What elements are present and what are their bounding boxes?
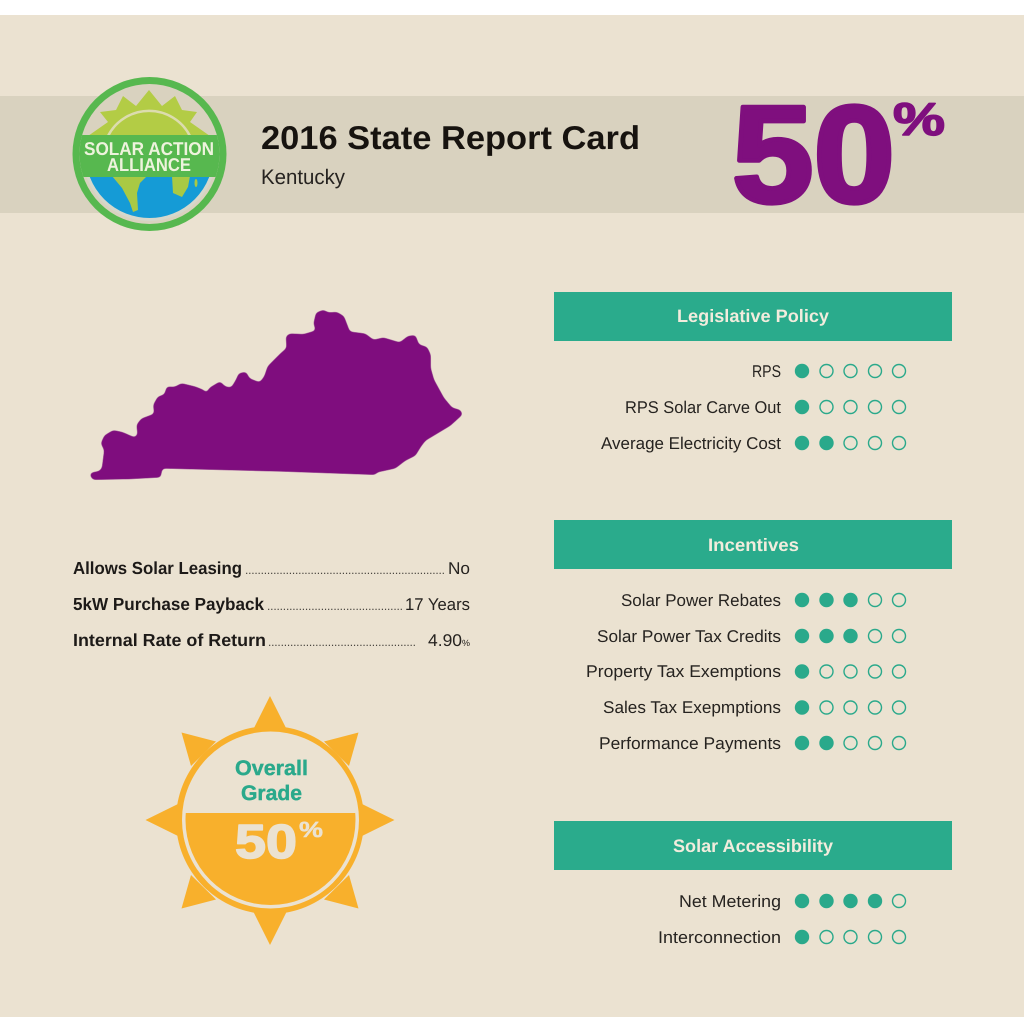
fact: solar leasing: ................................................................ xyxy=(245,563,445,577)
heading bar xyxy=(554,520,952,569)
row: interconnection: Interconnection xyxy=(658,928,781,947)
heading bar xyxy=(554,292,952,341)
row: average electricity cost xyxy=(601,434,906,453)
fact: rate of return: 4.90 xyxy=(428,631,462,650)
badge score xyxy=(235,816,323,869)
row: solar power rebates xyxy=(621,591,906,610)
row: RPS: RPS xyxy=(752,362,781,381)
row: property tax exemptions: Property Tax Exemptions xyxy=(586,662,781,681)
fact: solar leasing xyxy=(73,558,470,578)
badge label: Grade xyxy=(241,782,302,805)
fact: payback xyxy=(73,594,470,614)
fact: rate of return xyxy=(73,630,470,650)
row: average electricity cost: Average Electricity Cost xyxy=(601,434,781,453)
badge: overall grade sun xyxy=(146,696,394,945)
logo wordmark: SOLAR ACTION xyxy=(84,138,214,159)
fact: solar leasing: No xyxy=(448,559,470,578)
row: solar power tax credits: Solar Power Tax Credits xyxy=(597,627,781,646)
icon: Solar Action Alliance logo: ALLIANCE xyxy=(107,154,191,175)
row: interconnection xyxy=(658,928,906,947)
badge score: 50 xyxy=(235,816,297,869)
row: performance payments xyxy=(599,734,906,753)
row: net metering xyxy=(679,892,906,911)
badge label: Overall xyxy=(235,757,308,780)
panel: legislative policy xyxy=(554,292,952,453)
heading bar: Legislative Policy xyxy=(677,306,829,326)
row: RPS solar carve out: RPS Solar Carve Out xyxy=(625,398,781,417)
row: RPS solar carve out xyxy=(625,398,906,417)
fact: payback: 5kW Purchase Payback xyxy=(73,594,264,614)
row: net metering: Net Metering xyxy=(679,892,781,911)
title: 2016 State Report Card xyxy=(261,119,640,156)
row: solar power tax credits xyxy=(597,627,906,646)
badge score: % xyxy=(299,817,323,842)
row: sales tax exemptions xyxy=(603,698,906,717)
headline score: % xyxy=(893,93,945,145)
row: RPS xyxy=(752,362,906,381)
row: property tax exemptions xyxy=(586,662,906,681)
headline score: 50 xyxy=(732,78,895,232)
heading bar: Solar Accessibility xyxy=(673,836,833,856)
fact: payback: 17 Years xyxy=(405,595,470,614)
heading bar: Incentives xyxy=(708,535,799,555)
map: Kentucky silhouette xyxy=(91,311,462,479)
row: solar power rebates: Solar Power Rebates xyxy=(621,591,781,610)
header band xyxy=(0,96,1024,213)
fact table xyxy=(73,558,470,650)
row: sales tax exemptions: Sales Tax Exepmptions xyxy=(603,698,781,717)
subtitle: state name: Kentucky xyxy=(261,166,345,189)
panel: solar accessibility xyxy=(554,821,952,947)
badge label xyxy=(235,757,308,805)
fact: payback: ........................................... xyxy=(267,599,403,613)
icon: Solar Action Alliance logo xyxy=(70,77,230,231)
heading bar xyxy=(554,821,952,870)
fact: rate of return: Internal Rate of Return xyxy=(73,630,266,650)
fact: solar leasing: Allows Solar Leasing xyxy=(73,558,242,578)
panel: incentives xyxy=(554,520,952,753)
fact: rate of return: ............................................... xyxy=(268,635,416,649)
row: performance payments: Performance Payments xyxy=(599,734,781,753)
fact: rate of return: % xyxy=(462,638,470,648)
